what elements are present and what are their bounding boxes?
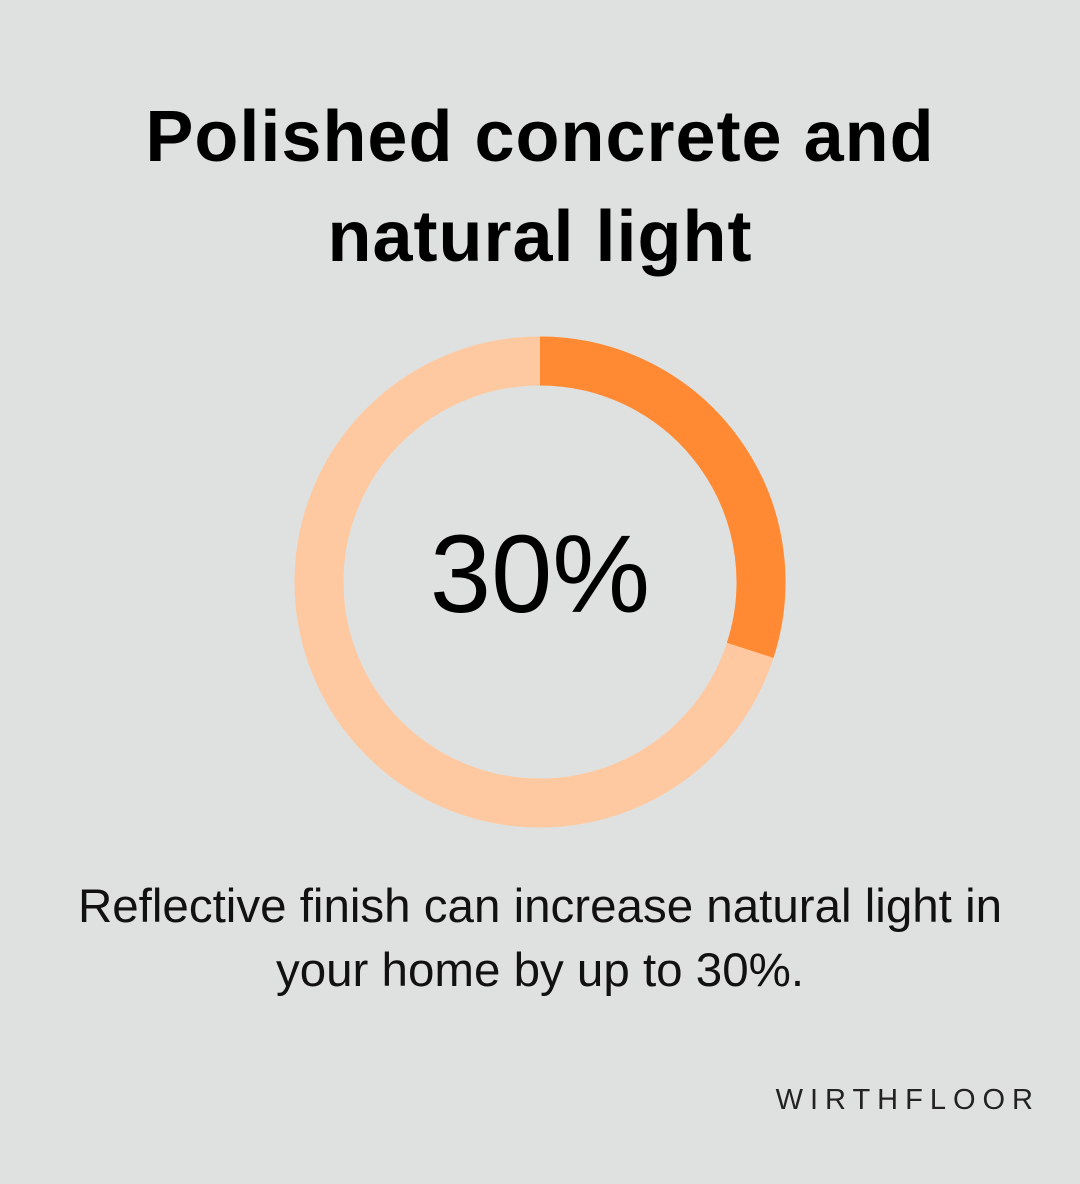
title: Polished concrete and <box>145 97 935 177</box>
donut track <box>319 361 761 803</box>
description text: Reflective finish can increase natural light in <box>78 880 1002 933</box>
logo: WIRTHFLOOR <box>776 1084 1040 1116</box>
center percentage: 30% <box>430 513 650 636</box>
donut value arc 30% <box>540 361 761 650</box>
title: natural light <box>328 197 752 277</box>
title <box>145 97 935 277</box>
description text: your home by up to 30%. <box>276 944 804 997</box>
description text <box>78 880 1002 997</box>
